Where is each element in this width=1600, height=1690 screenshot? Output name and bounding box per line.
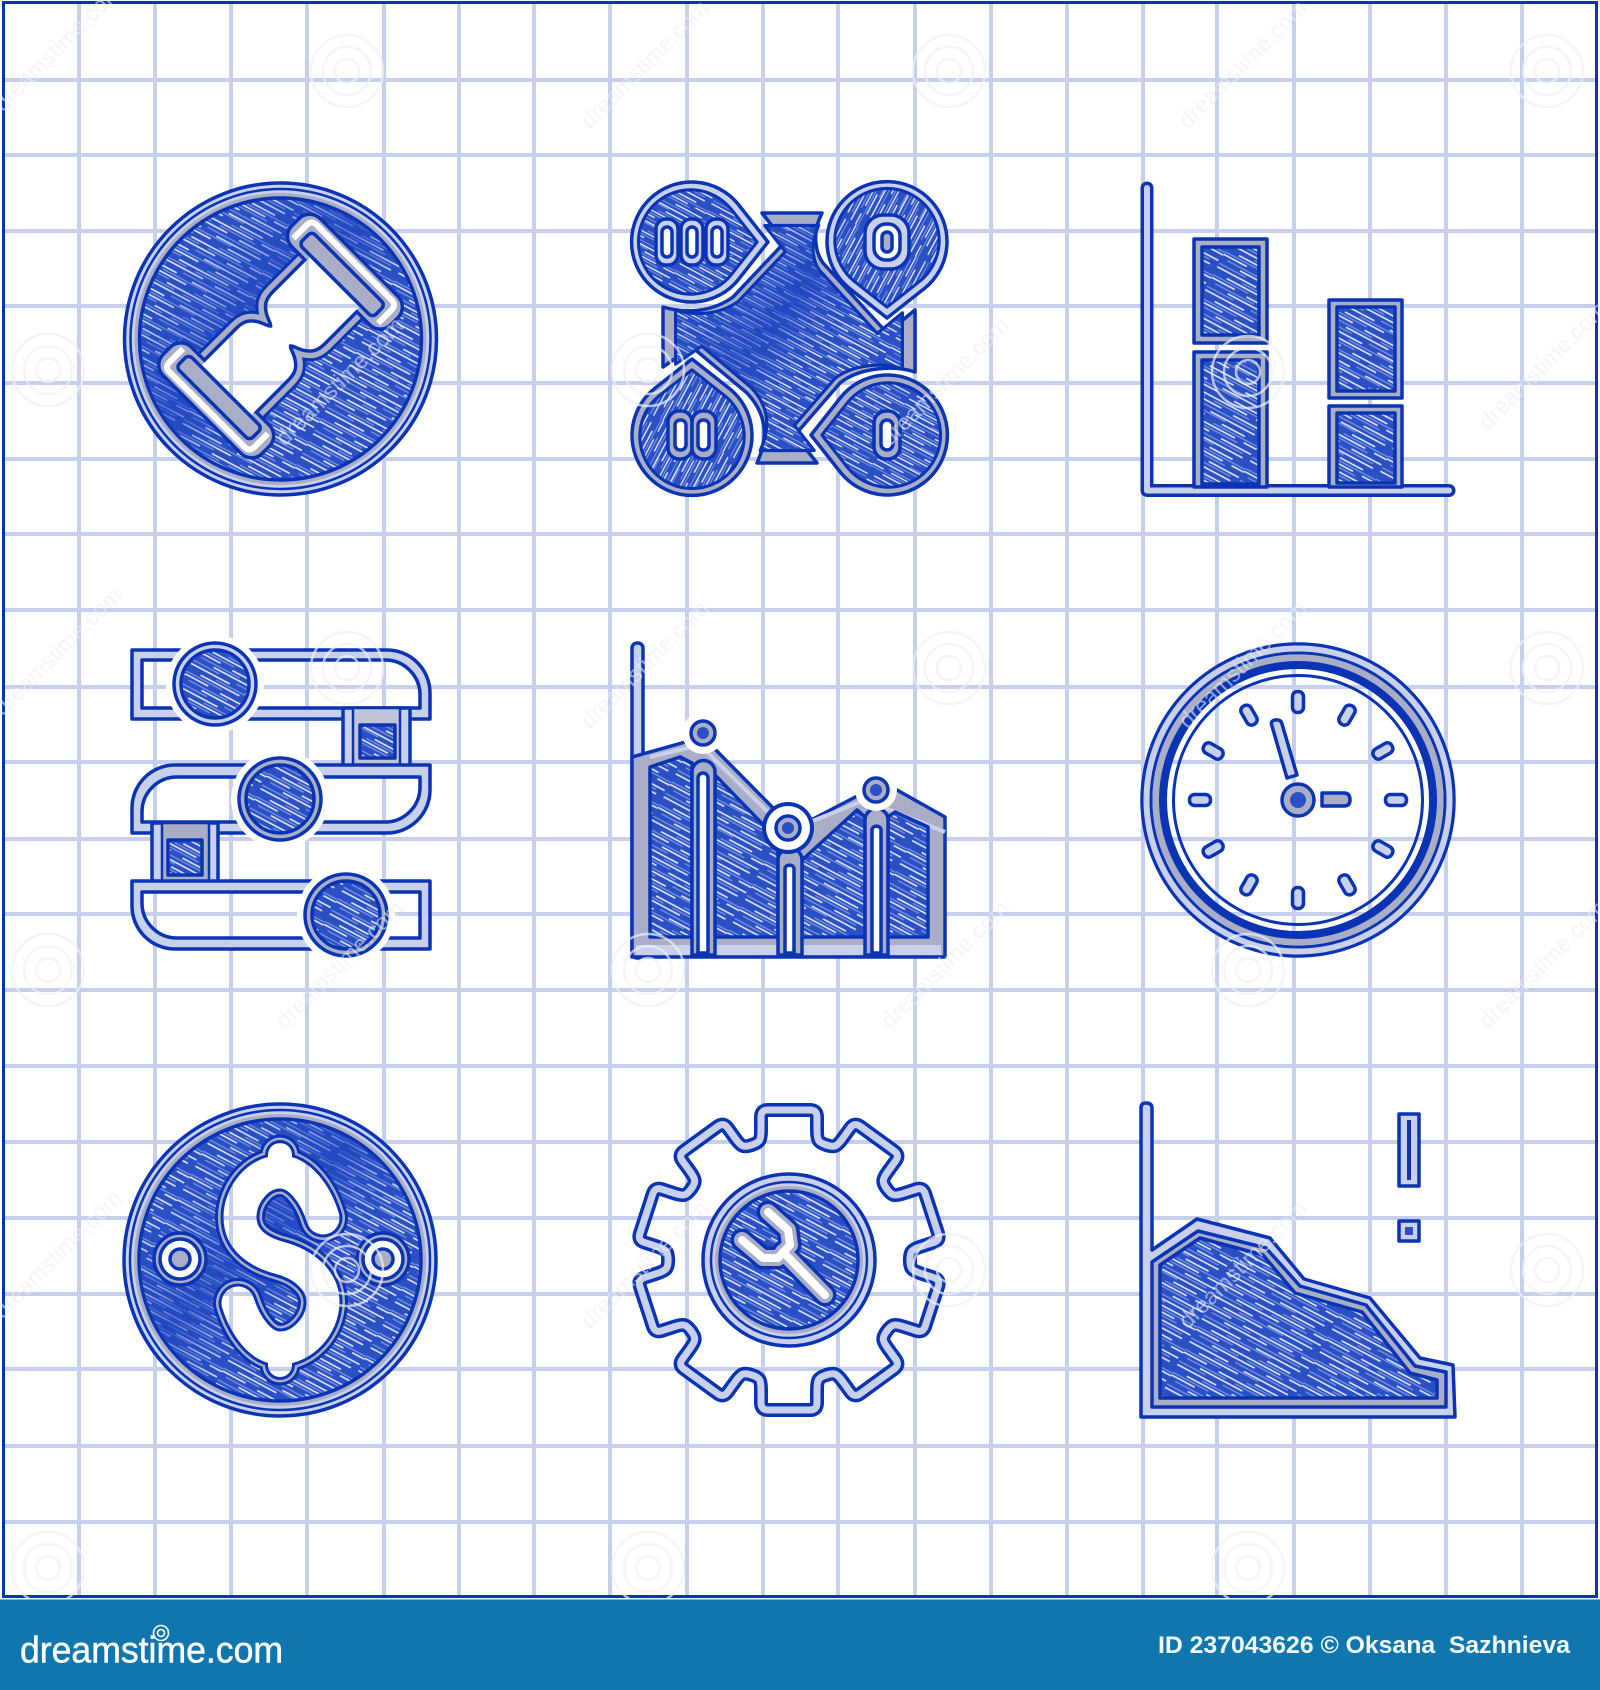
slider knob 2 <box>231 750 329 848</box>
filled area <box>1160 1238 1437 1398</box>
watermark text: dreamstime.com <box>875 312 1014 451</box>
slider knob 3 <box>297 866 395 964</box>
hourglass body and caps <box>153 208 409 464</box>
watermark text: dreamstime.com <box>575 595 714 734</box>
watermark text: dreamstime.com <box>875 895 1014 1034</box>
minute hand <box>1271 720 1297 778</box>
watermark text: dreamstime.com <box>270 312 409 451</box>
middle band <box>1152 1231 1446 1407</box>
data point 3 <box>855 769 897 811</box>
icon: four pins around a star shape <box>632 182 947 495</box>
right dot <box>357 1233 409 1285</box>
bars <box>1194 239 1267 343</box>
dollar sign outline <box>238 1155 323 1365</box>
connector square 2 <box>152 823 218 889</box>
exclamation dot <box>1399 1221 1419 1241</box>
icon: slider controls <box>132 635 430 964</box>
chart axes <box>1147 188 1449 490</box>
central star <box>663 213 915 463</box>
gear outline <box>635 1110 943 1410</box>
icon: dollar coin <box>124 1104 436 1416</box>
icon: stacked bar chart <box>1147 188 1449 490</box>
icon: wall clock <box>1142 644 1454 956</box>
clock hub <box>1282 784 1314 816</box>
pin bottom right <box>811 375 947 495</box>
exclamation bar <box>1399 1114 1419 1186</box>
slider track 1 <box>132 650 430 719</box>
icon: gear with wrench <box>635 1110 943 1410</box>
watermark text: dreamstime.com <box>270 895 409 1034</box>
footer logo text: dreamstime.com <box>20 1630 283 1670</box>
clock rim <box>1142 644 1454 956</box>
data point 2 <box>762 802 814 854</box>
hour hand <box>1322 793 1350 806</box>
column gaps <box>692 761 715 955</box>
left dot <box>154 1233 206 1285</box>
watermark text: dreamstime.com <box>1173 1195 1312 1334</box>
data point 1 <box>682 712 724 754</box>
wrench <box>742 1212 825 1295</box>
icon: hourglass in circle <box>124 183 436 495</box>
watermark text: dreamstime.com <box>1173 595 1312 734</box>
area columns <box>650 757 692 937</box>
hour ticks <box>1190 692 1406 908</box>
icon: line and area chart <box>632 643 945 958</box>
icon: declining area chart with warning <box>1141 1103 1455 1417</box>
watermark text <box>0 0 1600 1334</box>
watermark text: dreamstime.com <box>575 1195 714 1334</box>
axes and area outline <box>1141 1103 1455 1417</box>
footer logo spiral <box>154 1626 168 1640</box>
slider track 3 <box>132 881 430 949</box>
gear hub <box>703 1174 875 1346</box>
pin top left <box>632 182 768 302</box>
vertical axis <box>632 643 643 958</box>
coin rings <box>124 1104 436 1416</box>
slider knob 1 <box>166 635 264 733</box>
connector square 1 <box>343 708 410 775</box>
pin bottom left <box>632 359 752 495</box>
pin top right <box>827 182 947 318</box>
slider track 2 <box>132 765 430 833</box>
coin rings <box>124 183 436 495</box>
area outline <box>632 737 945 957</box>
footer credit text: ID 237043626 © Oksana Sazhnieva <box>1158 1632 1571 1659</box>
footer bar <box>0 1598 1600 1690</box>
